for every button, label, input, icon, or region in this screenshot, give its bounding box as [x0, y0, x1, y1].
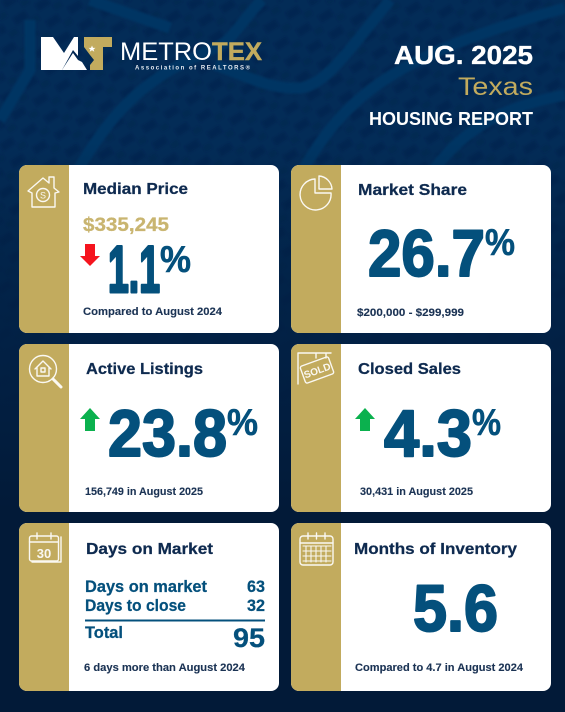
heading: Closed Sales: [358, 361, 461, 378]
icon: magnifier with house: [30, 356, 61, 387]
percent sign: %: [160, 239, 191, 280]
footnote: 6 days more than August 2024: [84, 662, 246, 674]
title: housing report: HOUSING REPORT: [369, 109, 533, 129]
icon: house with dollar: S: [40, 190, 46, 200]
icon: calendar grid: [300, 533, 333, 565]
big number: 1.1: [108, 232, 160, 306]
icon: sold sign: [298, 353, 334, 384]
row: total: 95: [233, 623, 265, 653]
icon: red down arrow: [80, 244, 100, 266]
heading: Days on Market: [86, 541, 214, 558]
big number: 23.8: [108, 396, 227, 470]
row: days on market: 63: [247, 577, 265, 596]
big number: 5.6: [413, 571, 498, 645]
row: total: Total: [85, 623, 123, 642]
footnote: 30,431 in August 2025: [360, 486, 473, 498]
panel: closed sales: [291, 344, 551, 512]
icon: sold sign: SOLD: [303, 361, 332, 381]
panel: days on market: [19, 523, 279, 691]
heading: Active Listings: [86, 361, 203, 378]
row: days to close: [85, 596, 265, 615]
percent sign: %: [227, 402, 258, 443]
logo mark: [41, 37, 112, 70]
row: days to close: Days to close: [85, 596, 186, 615]
footnote: 156,749 in August 2025: [85, 486, 203, 498]
heading: Market Share: [358, 182, 467, 199]
title: date: AUG. 2025: [394, 42, 533, 70]
icon: green up arrow: [80, 408, 100, 431]
footnote: $200,000 - $299,999: [357, 307, 464, 319]
logo: MetroTex Association of Realtors: [41, 37, 262, 72]
row: days on market: Days on market: [85, 577, 207, 596]
big number: 4.3: [384, 396, 472, 470]
footnote: Compared to August 2024: [83, 306, 223, 318]
big number: 26.7: [368, 216, 485, 290]
logo tagline: Association of REALTORS®: [135, 64, 251, 72]
logo: MetroTex Association of Realtors: TEX: [212, 38, 262, 66]
panel: market share: [291, 165, 551, 333]
row: days to close: 32: [247, 596, 265, 615]
percent sign: %: [485, 222, 515, 263]
footnote: Compared to 4.7 in August 2024: [355, 662, 524, 674]
percent sign: %: [472, 402, 501, 443]
panel: active listings: [19, 344, 279, 512]
panel: months of inventory: [291, 523, 551, 691]
icon: house with dollar: [28, 177, 59, 207]
panel: median price: [19, 165, 279, 333]
heading: Median Price: [83, 181, 188, 198]
median price value: $335,245: [83, 215, 169, 236]
row: total: [85, 623, 265, 653]
heading: Months of Inventory: [354, 541, 517, 558]
icon: calendar 30: 30: [37, 546, 51, 561]
icon: green up arrow: [355, 408, 375, 431]
icon: pie chart: [300, 176, 332, 210]
title: state: Texas: [458, 73, 533, 101]
icon: calendar 30: [30, 533, 61, 562]
logo wordmark: METRO: [120, 38, 212, 66]
